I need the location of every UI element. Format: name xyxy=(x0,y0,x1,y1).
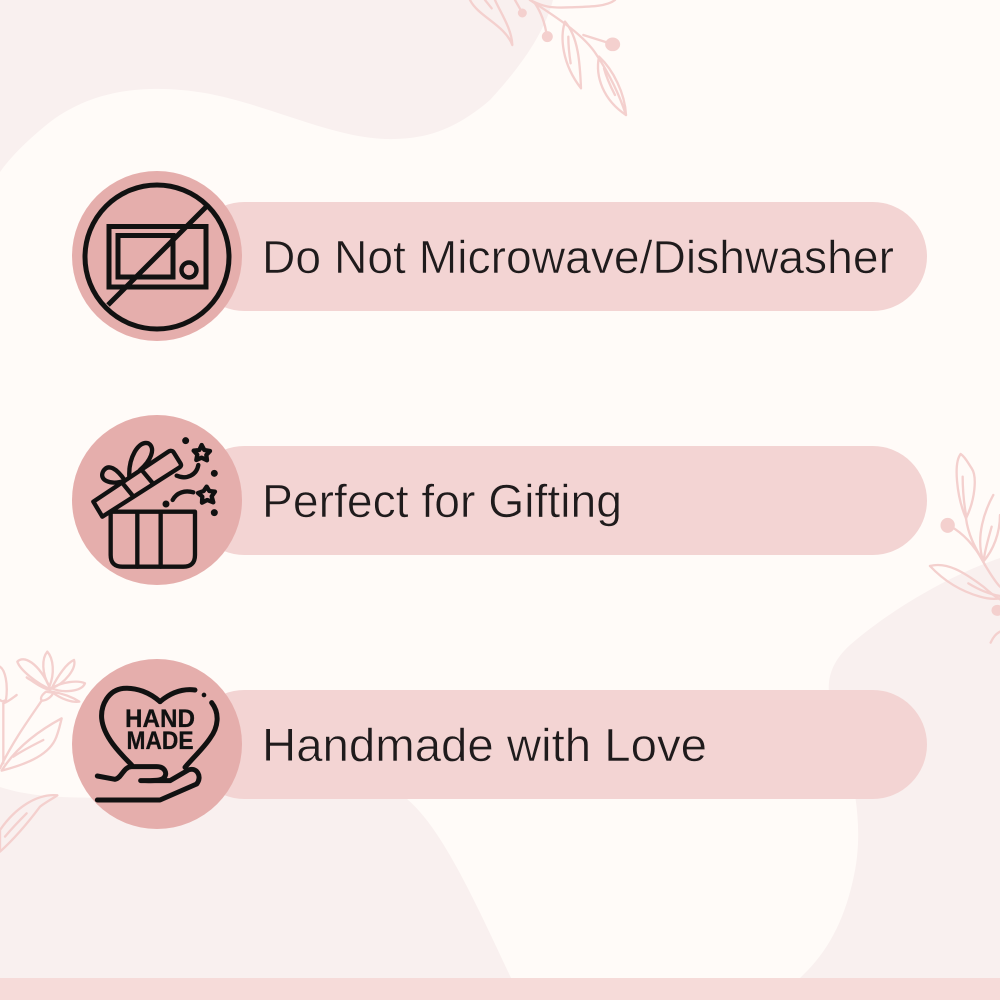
background blob: top left xyxy=(0,0,553,172)
icon text: handmade: MADE xyxy=(126,727,194,755)
row 1: do not microwave xyxy=(72,171,927,341)
row 3: handmade with love xyxy=(72,659,927,829)
background blob: bottom right xyxy=(800,558,1000,978)
icon text: handmade: HAND xyxy=(125,705,195,733)
icon badge: handmade heart xyxy=(72,659,242,829)
foliage: left xyxy=(0,652,85,852)
icon text: handmade xyxy=(125,705,195,755)
icon badge: gift box xyxy=(72,415,242,585)
label: row 2: Perfect for Gifting xyxy=(262,475,622,527)
foliage: right xyxy=(930,454,1000,643)
pill: row 2 xyxy=(190,446,927,555)
icon badge: no microwave xyxy=(72,171,242,341)
pill: row 3 xyxy=(190,690,927,799)
bottom strip xyxy=(0,978,1000,1000)
row 2: perfect for gifting xyxy=(72,415,927,585)
label: row 1: Do Not Microwave/Dishwasher xyxy=(262,231,894,283)
label: row 3: Handmade with Love xyxy=(262,719,707,771)
pill: row 1 xyxy=(190,202,927,311)
foliage: top xyxy=(470,0,626,115)
background blob: bottom left xyxy=(0,787,511,978)
